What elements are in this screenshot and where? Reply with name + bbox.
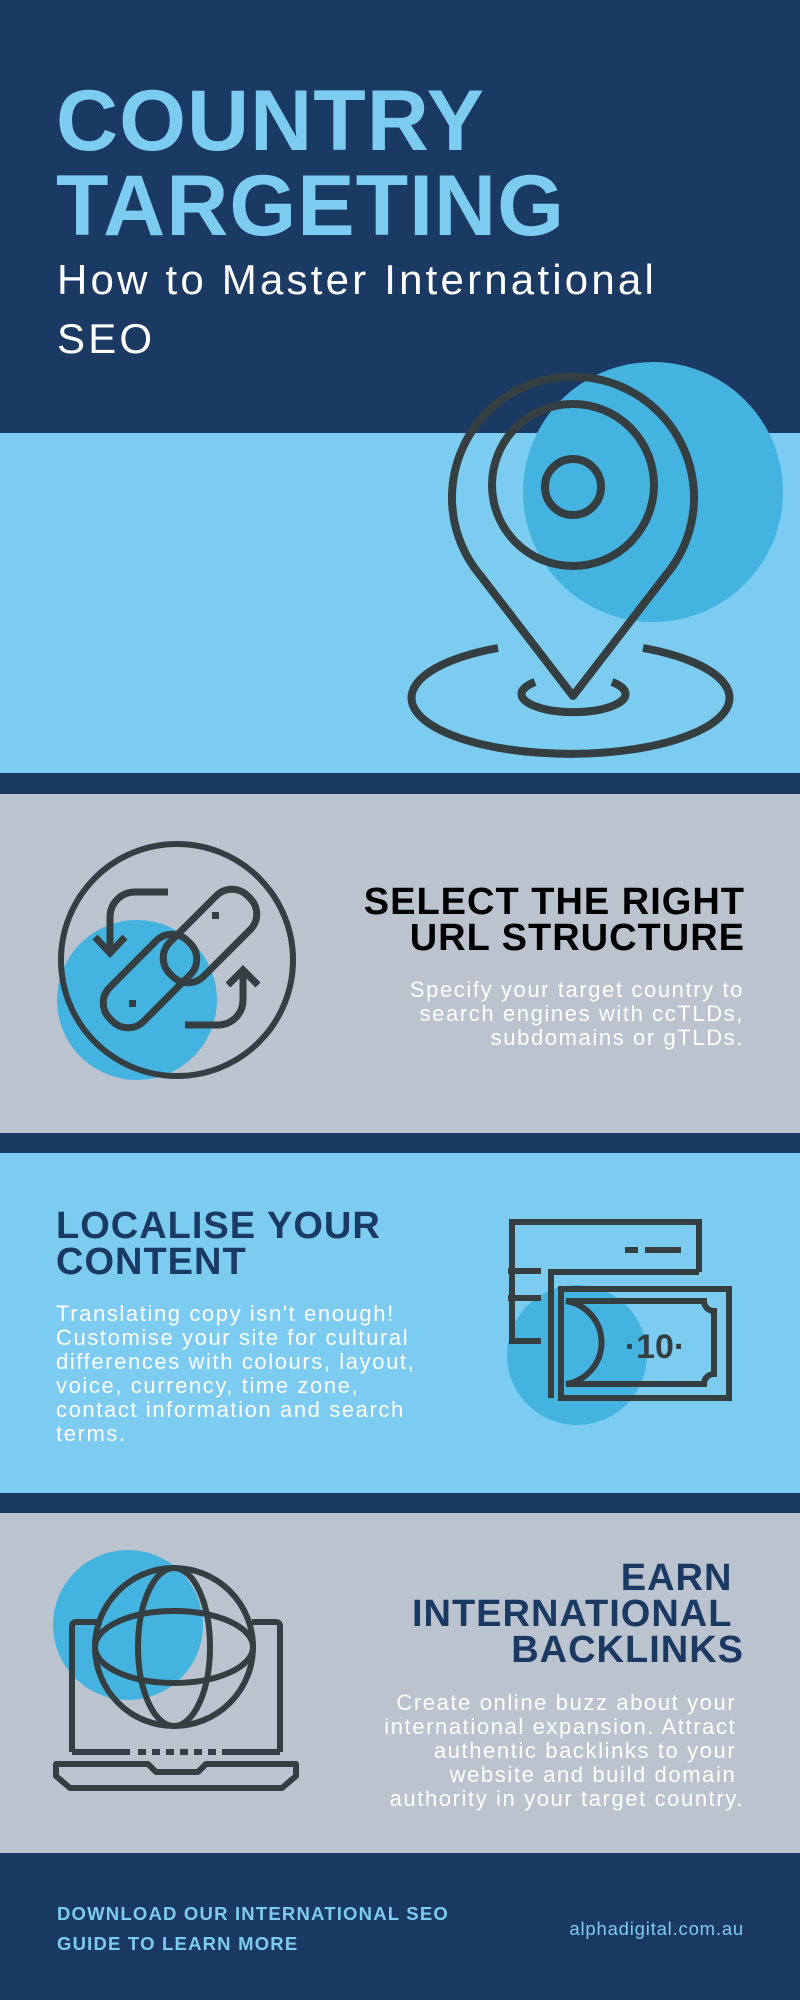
heading: select the right url structure xyxy=(364,881,745,959)
footer call to action xyxy=(57,1903,449,1954)
heading: select the right url structure: SELECT THE RIGHT xyxy=(364,881,745,923)
text: url structure body: subdomains or gTLDs. xyxy=(491,1025,744,1050)
text: backlinks body: website and build domain xyxy=(450,1762,736,1787)
heading: localise your content: LOCALISE YOUR xyxy=(56,1205,381,1247)
panel: localise xyxy=(0,1153,800,1493)
title xyxy=(56,73,565,254)
heading: localise your content: CONTENT xyxy=(56,1241,247,1283)
icon: browser and money xyxy=(507,1219,732,1425)
text: url structure body: Specify your target country to xyxy=(410,977,744,1002)
text: localise body: contact information and search xyxy=(56,1397,405,1422)
panel: backlinks xyxy=(0,1513,800,1853)
heading: earn international backlinks: INTERNATIONAL xyxy=(412,1593,732,1635)
text: backlinks body xyxy=(384,1690,744,1811)
icon: chain link xyxy=(57,841,296,1080)
text: localise body: Translating copy isn't enough! xyxy=(56,1301,395,1326)
text: localise body xyxy=(56,1301,415,1446)
text: backlinks body: authority in your target country. xyxy=(390,1786,744,1811)
panel: url structure xyxy=(0,794,800,1133)
subtitle: SEO xyxy=(57,315,155,362)
footer call to action: DOWNLOAD OUR INTERNATIONAL SEO xyxy=(57,1903,449,1924)
text: backlinks body: Create online buzz about your xyxy=(396,1690,736,1715)
panel: header xyxy=(0,0,800,433)
subtitle: How to Master International xyxy=(57,256,657,303)
icon: location pin xyxy=(408,362,783,758)
heading: earn international backlinks xyxy=(412,1557,744,1671)
text: backlinks body: international expansion. Attract xyxy=(384,1714,736,1739)
footer url: alphadigital.com.au xyxy=(569,1918,744,1939)
heading: earn international backlinks: EARN xyxy=(621,1557,732,1599)
panel: hero light band xyxy=(0,433,800,773)
icon: globe laptop xyxy=(53,1550,299,1791)
heading: earn international backlinks: BACKLINKS xyxy=(511,1629,744,1671)
text: localise body: voice, currency, time zone, xyxy=(56,1373,359,1398)
heading: localise your content xyxy=(56,1205,381,1283)
text: localise body: Customise your site for cultural xyxy=(56,1325,409,1350)
footer call to action: GUIDE TO LEARN MORE xyxy=(57,1933,298,1954)
text: localise body: terms. xyxy=(56,1421,127,1446)
heading: select the right url structure: URL STRUCTURE xyxy=(410,917,745,959)
text: url structure body xyxy=(410,977,744,1050)
title: COUNTRY xyxy=(56,73,485,169)
text: url structure body: search engines with ccTLDs, xyxy=(420,1001,744,1026)
icon: browser and money: ·10· xyxy=(625,1328,685,1366)
text: localise body: differences with colours, layout, xyxy=(56,1349,415,1374)
subtitle xyxy=(57,256,657,362)
title: TARGETING xyxy=(56,158,565,254)
text: backlinks body: authentic backlinks to your xyxy=(434,1738,736,1763)
